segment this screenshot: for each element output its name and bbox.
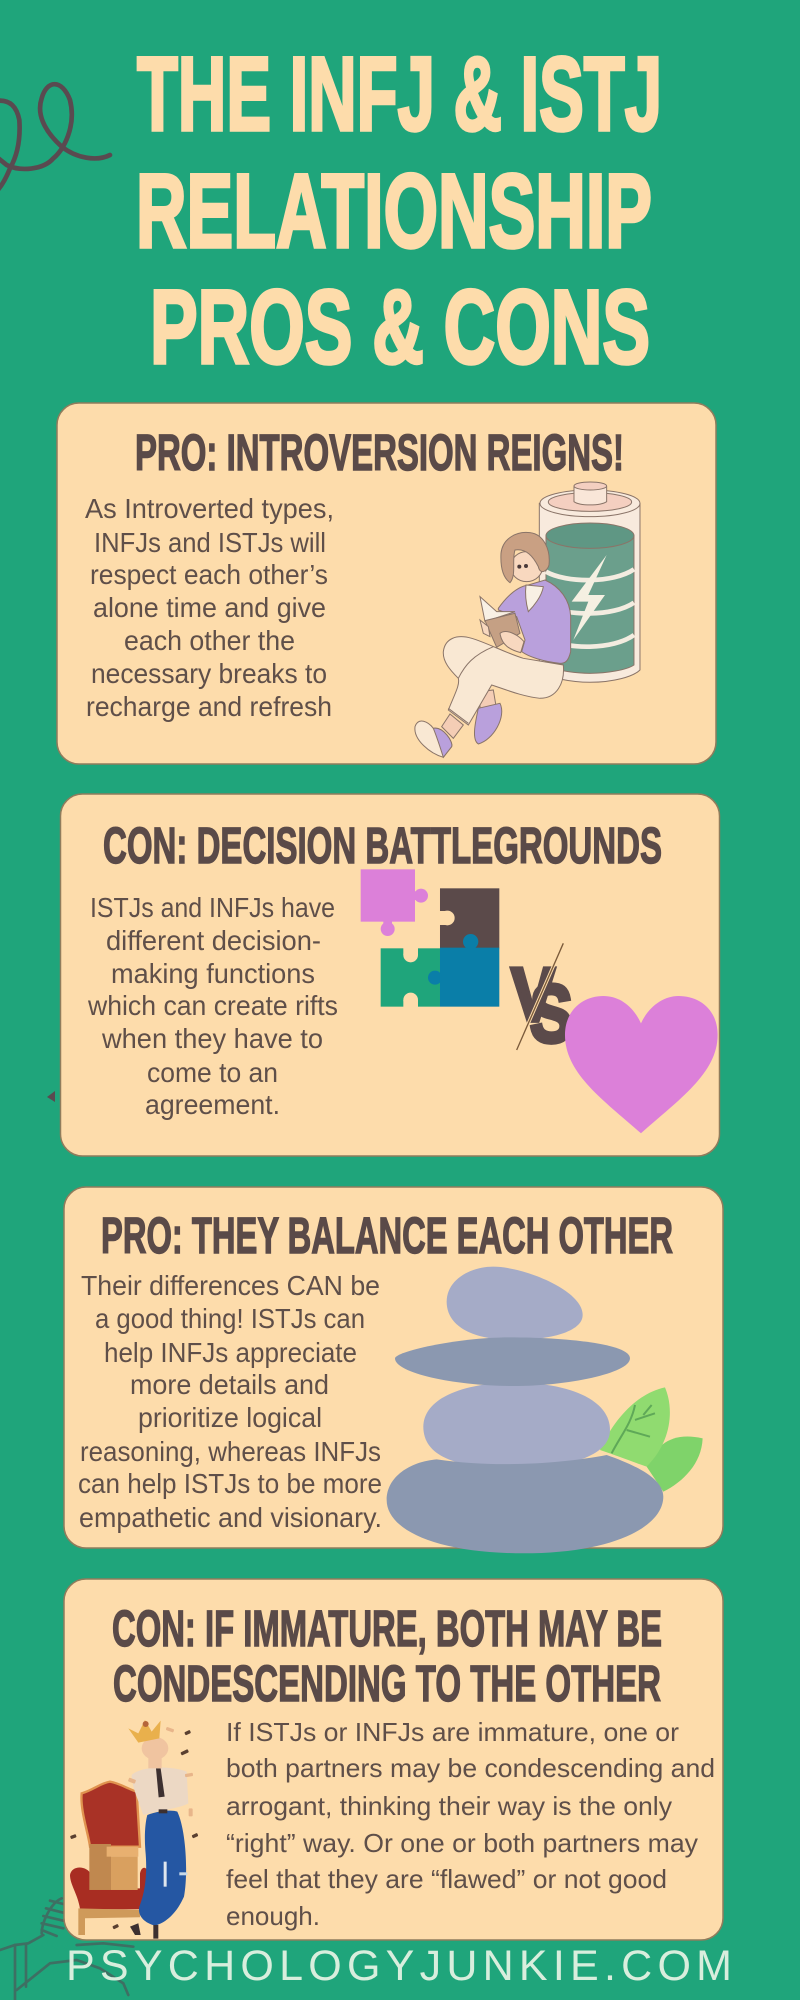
text block: balance	[78, 1270, 382, 1533]
text block: balance: help INFJs appreciate	[104, 1337, 357, 1368]
text block: introversion: alone time and give	[93, 592, 326, 623]
text block: immature: feel that they are “flawed” or not good	[226, 1864, 667, 1894]
icon: scribble doodle top left	[0, 84, 110, 189]
text block: decisions: agreement.	[145, 1089, 280, 1120]
text block: balance: a good thing! ISTJs can	[95, 1303, 365, 1334]
text block: introversion: each other the	[124, 625, 295, 656]
icon: heart	[565, 996, 718, 1133]
panel: they balance each other	[64, 1187, 723, 1553]
text block: decisions: come to an	[147, 1057, 278, 1088]
text block: balance: Their differences CAN be	[81, 1270, 380, 1301]
text block: introversion: respect each other’s	[90, 559, 328, 590]
text block: balance: empathetic and visionary.	[79, 1502, 382, 1533]
icon: woman reading against battery	[415, 482, 640, 757]
panel: decision battlegrounds	[60, 794, 720, 1156]
icon: versus mark: V	[511, 953, 555, 1037]
text block: balance: more details and	[130, 1369, 329, 1400]
text block: immature: If ISTJs or INFJs are immature, one or	[226, 1717, 679, 1747]
text block: decisions: making functions	[111, 958, 315, 989]
text block: introversion: INFJs and ISTJs will	[94, 527, 326, 558]
text block: balance: can help ISTJs to be more	[78, 1468, 382, 1499]
text block: immature: “right” way. Or one or both partners may	[226, 1828, 698, 1858]
icon: versus mark	[511, 943, 573, 1060]
text block: decisions: which can create rifts	[87, 990, 338, 1021]
text block: immature: enough.	[226, 1901, 320, 1931]
icon: balanced stones and leaves	[387, 1267, 703, 1553]
icon: puzzle pieces	[361, 869, 499, 1008]
icon: doodle bottom left	[0, 1898, 133, 2000]
text block: balance: reasoning, whereas INFJs	[80, 1436, 381, 1467]
icon: king leaning on throne	[70, 1720, 198, 1939]
panel: condescending	[64, 1579, 723, 1940]
heading: con immature	[112, 1600, 662, 1712]
text block: introversion: As Introverted types,	[85, 493, 334, 524]
text block: introversion: necessary breaks to	[91, 658, 327, 689]
panel: introversion reigns	[57, 403, 716, 764]
text block: decisions: ISTJs and INFJs have	[90, 892, 335, 923]
text block: balance: prioritize logical	[138, 1402, 322, 1433]
icon: versus mark: S	[530, 969, 573, 1060]
text block: introversion	[85, 493, 334, 722]
text block: decisions: when they have to	[101, 1023, 323, 1054]
footer: website name: PSYCHOLOGYJUNKIE.COM	[66, 1942, 732, 1990]
text block: immature: arrogant, thinking their way is the only	[226, 1791, 672, 1821]
small mark beside panel 2	[47, 1091, 55, 1102]
text block: decisions	[87, 892, 338, 1120]
title	[136, 36, 662, 386]
text block: immature	[226, 1717, 715, 1931]
text block: introversion: recharge and refresh	[86, 691, 332, 722]
text block: immature: both partners may be condescending and	[226, 1753, 715, 1783]
text block: decisions: different decision-	[106, 925, 321, 956]
